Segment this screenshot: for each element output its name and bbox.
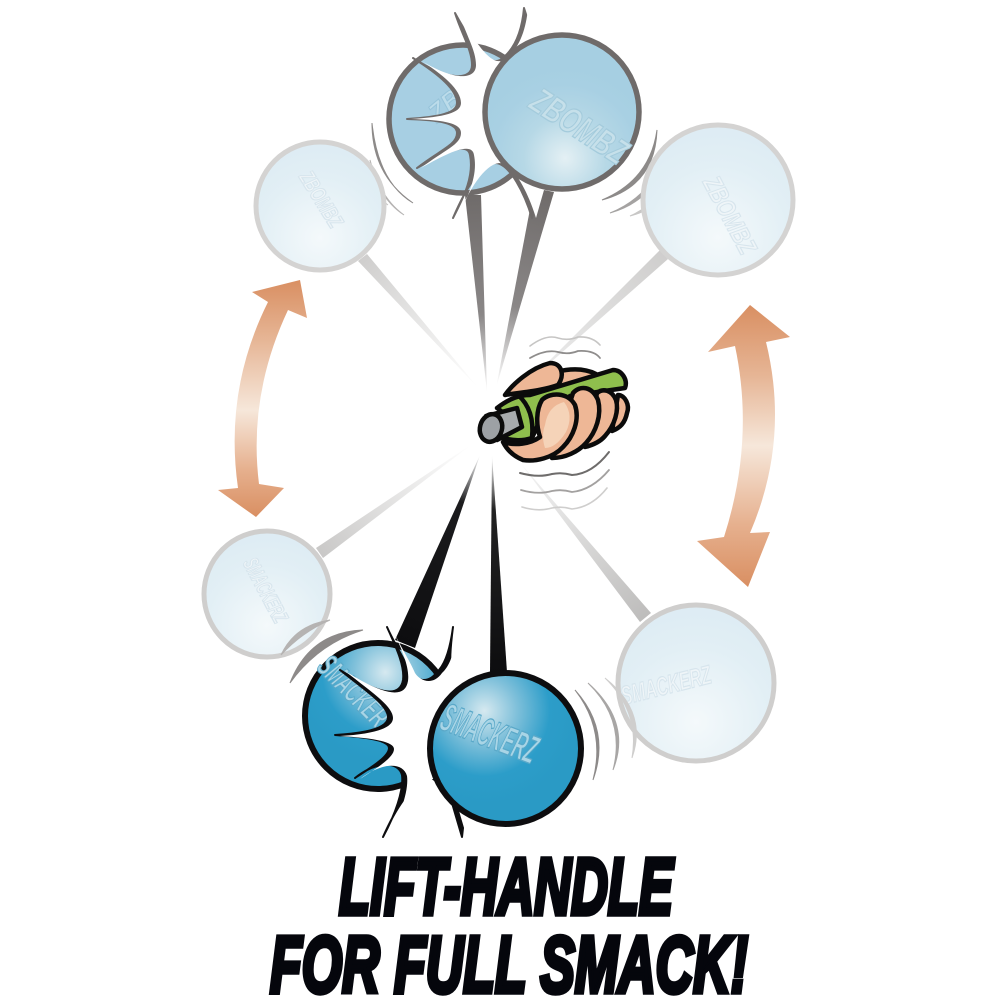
arrow: left double-headed bbox=[218, 280, 307, 517]
finger behind thumb bbox=[556, 369, 596, 392]
green handle bbox=[497, 370, 626, 440]
ghost ball: upper right bbox=[643, 125, 793, 275]
ghost ball: upper left: ZBOMBZ bbox=[294, 166, 349, 233]
finger highlight bbox=[543, 402, 570, 448]
ghost ball: lower right bbox=[618, 605, 774, 761]
motion lines: bottom balls bbox=[281, 620, 636, 780]
grey metal end bbox=[477, 408, 522, 444]
bottom right ball bbox=[430, 673, 581, 824]
bottom ball pair with impact burst bbox=[305, 627, 581, 838]
top left ball bbox=[389, 45, 537, 193]
index finger and palm bbox=[503, 395, 577, 460]
impact burst outline bbox=[335, 627, 500, 837]
bottom left ball: SMACKERZ bbox=[311, 648, 405, 742]
top right ball: ZBOMBZ bbox=[522, 79, 637, 173]
title bbox=[270, 842, 748, 1000]
ghost ball: lower left: SMACKERZ bbox=[238, 553, 293, 628]
arrow: right double-headed bbox=[697, 305, 790, 587]
bottom ball handles bbox=[395, 455, 507, 672]
middle finger bbox=[552, 388, 599, 458]
ghost ball: upper left bbox=[256, 142, 384, 270]
bottom right ball: SMACKERZ bbox=[435, 696, 545, 773]
thumb bbox=[505, 363, 562, 395]
impact burst outline bbox=[407, 8, 560, 218]
vibration lines around hand bbox=[520, 337, 609, 510]
icon: hand gripping handle bbox=[477, 363, 628, 460]
ghost ball: lower right: SMACKERZ bbox=[618, 659, 715, 711]
top ball handles bbox=[465, 188, 554, 392]
ghost handle lines bbox=[316, 250, 668, 622]
impact burst fill bbox=[340, 628, 505, 838]
title line 1: LIFT-HANDLE bbox=[339, 842, 675, 931]
impact burst fill bbox=[411, 8, 564, 218]
top left ball: ZB bbox=[421, 83, 468, 129]
motion lines: top balls bbox=[342, 123, 680, 216]
pinky finger bbox=[612, 395, 628, 431]
top right ball bbox=[485, 35, 639, 189]
collar crease bbox=[518, 395, 532, 438]
ring finger bbox=[585, 390, 617, 447]
top ball pair with impact burst bbox=[389, 8, 639, 218]
ghost ball: upper right: ZBOMBZ bbox=[697, 170, 763, 260]
ghost ball: lower left bbox=[204, 531, 330, 657]
